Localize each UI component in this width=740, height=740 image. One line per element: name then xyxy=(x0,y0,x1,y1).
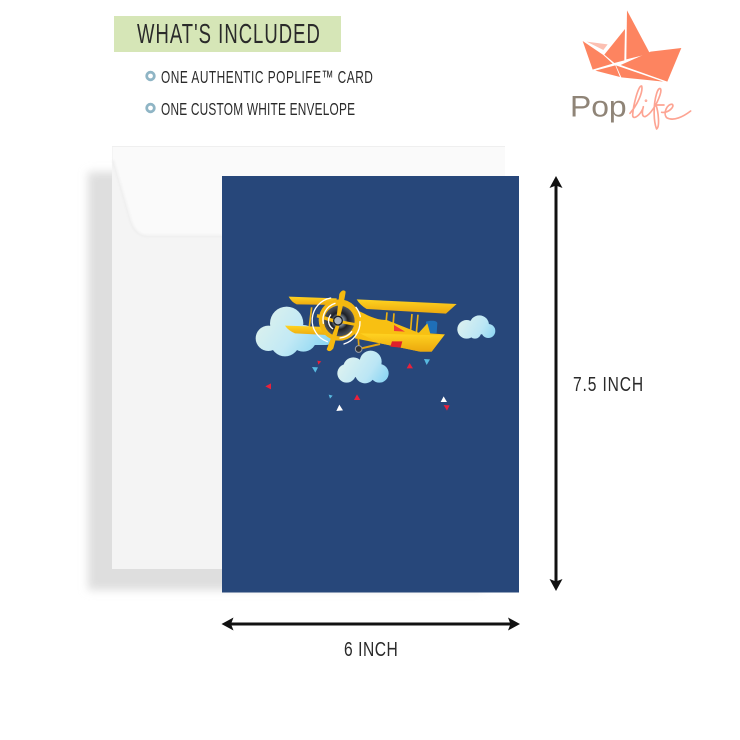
envelope body xyxy=(112,146,505,569)
envelope shadow xyxy=(88,172,483,590)
item: card: ONE AUTHENTIC POPLIFE™ CARD xyxy=(161,68,373,88)
label: width: 6 INCH xyxy=(344,638,398,660)
heading: what's included: WHAT'S INCLUDED xyxy=(137,19,320,50)
envelope xyxy=(88,146,505,590)
arrow: width dimension xyxy=(222,618,520,630)
envelope flap xyxy=(113,146,505,236)
upper wing xyxy=(289,297,337,305)
arrow: height dimension xyxy=(550,176,562,591)
wordmark: Pop: Pop xyxy=(570,91,627,124)
engine cowling xyxy=(319,299,360,341)
landing gear xyxy=(362,344,380,348)
illustration: biplane and clouds xyxy=(256,290,495,411)
icon: origami boat xyxy=(583,10,681,82)
lower wing left xyxy=(285,326,340,336)
list: included items xyxy=(147,68,373,120)
struts xyxy=(309,307,418,333)
heading: what's included xyxy=(114,16,341,52)
item: envelope: ONE CUSTOM WHITE ENVELOPE xyxy=(161,100,355,120)
cloud left xyxy=(256,307,333,356)
card xyxy=(222,176,519,592)
label: height: 7.5 INCH xyxy=(573,373,643,395)
biplane xyxy=(285,290,457,352)
cloud center xyxy=(337,351,389,383)
spinner hub xyxy=(334,316,342,325)
red stripes xyxy=(394,325,405,332)
confetti triangles xyxy=(265,359,450,411)
propeller xyxy=(317,290,357,351)
logo: Poplife xyxy=(570,10,691,129)
cloud right xyxy=(457,315,495,339)
tail xyxy=(426,321,437,333)
fuselage xyxy=(353,308,445,352)
wordmark: life xyxy=(630,86,691,129)
card face xyxy=(222,176,519,592)
propeller motion rings xyxy=(312,298,360,344)
